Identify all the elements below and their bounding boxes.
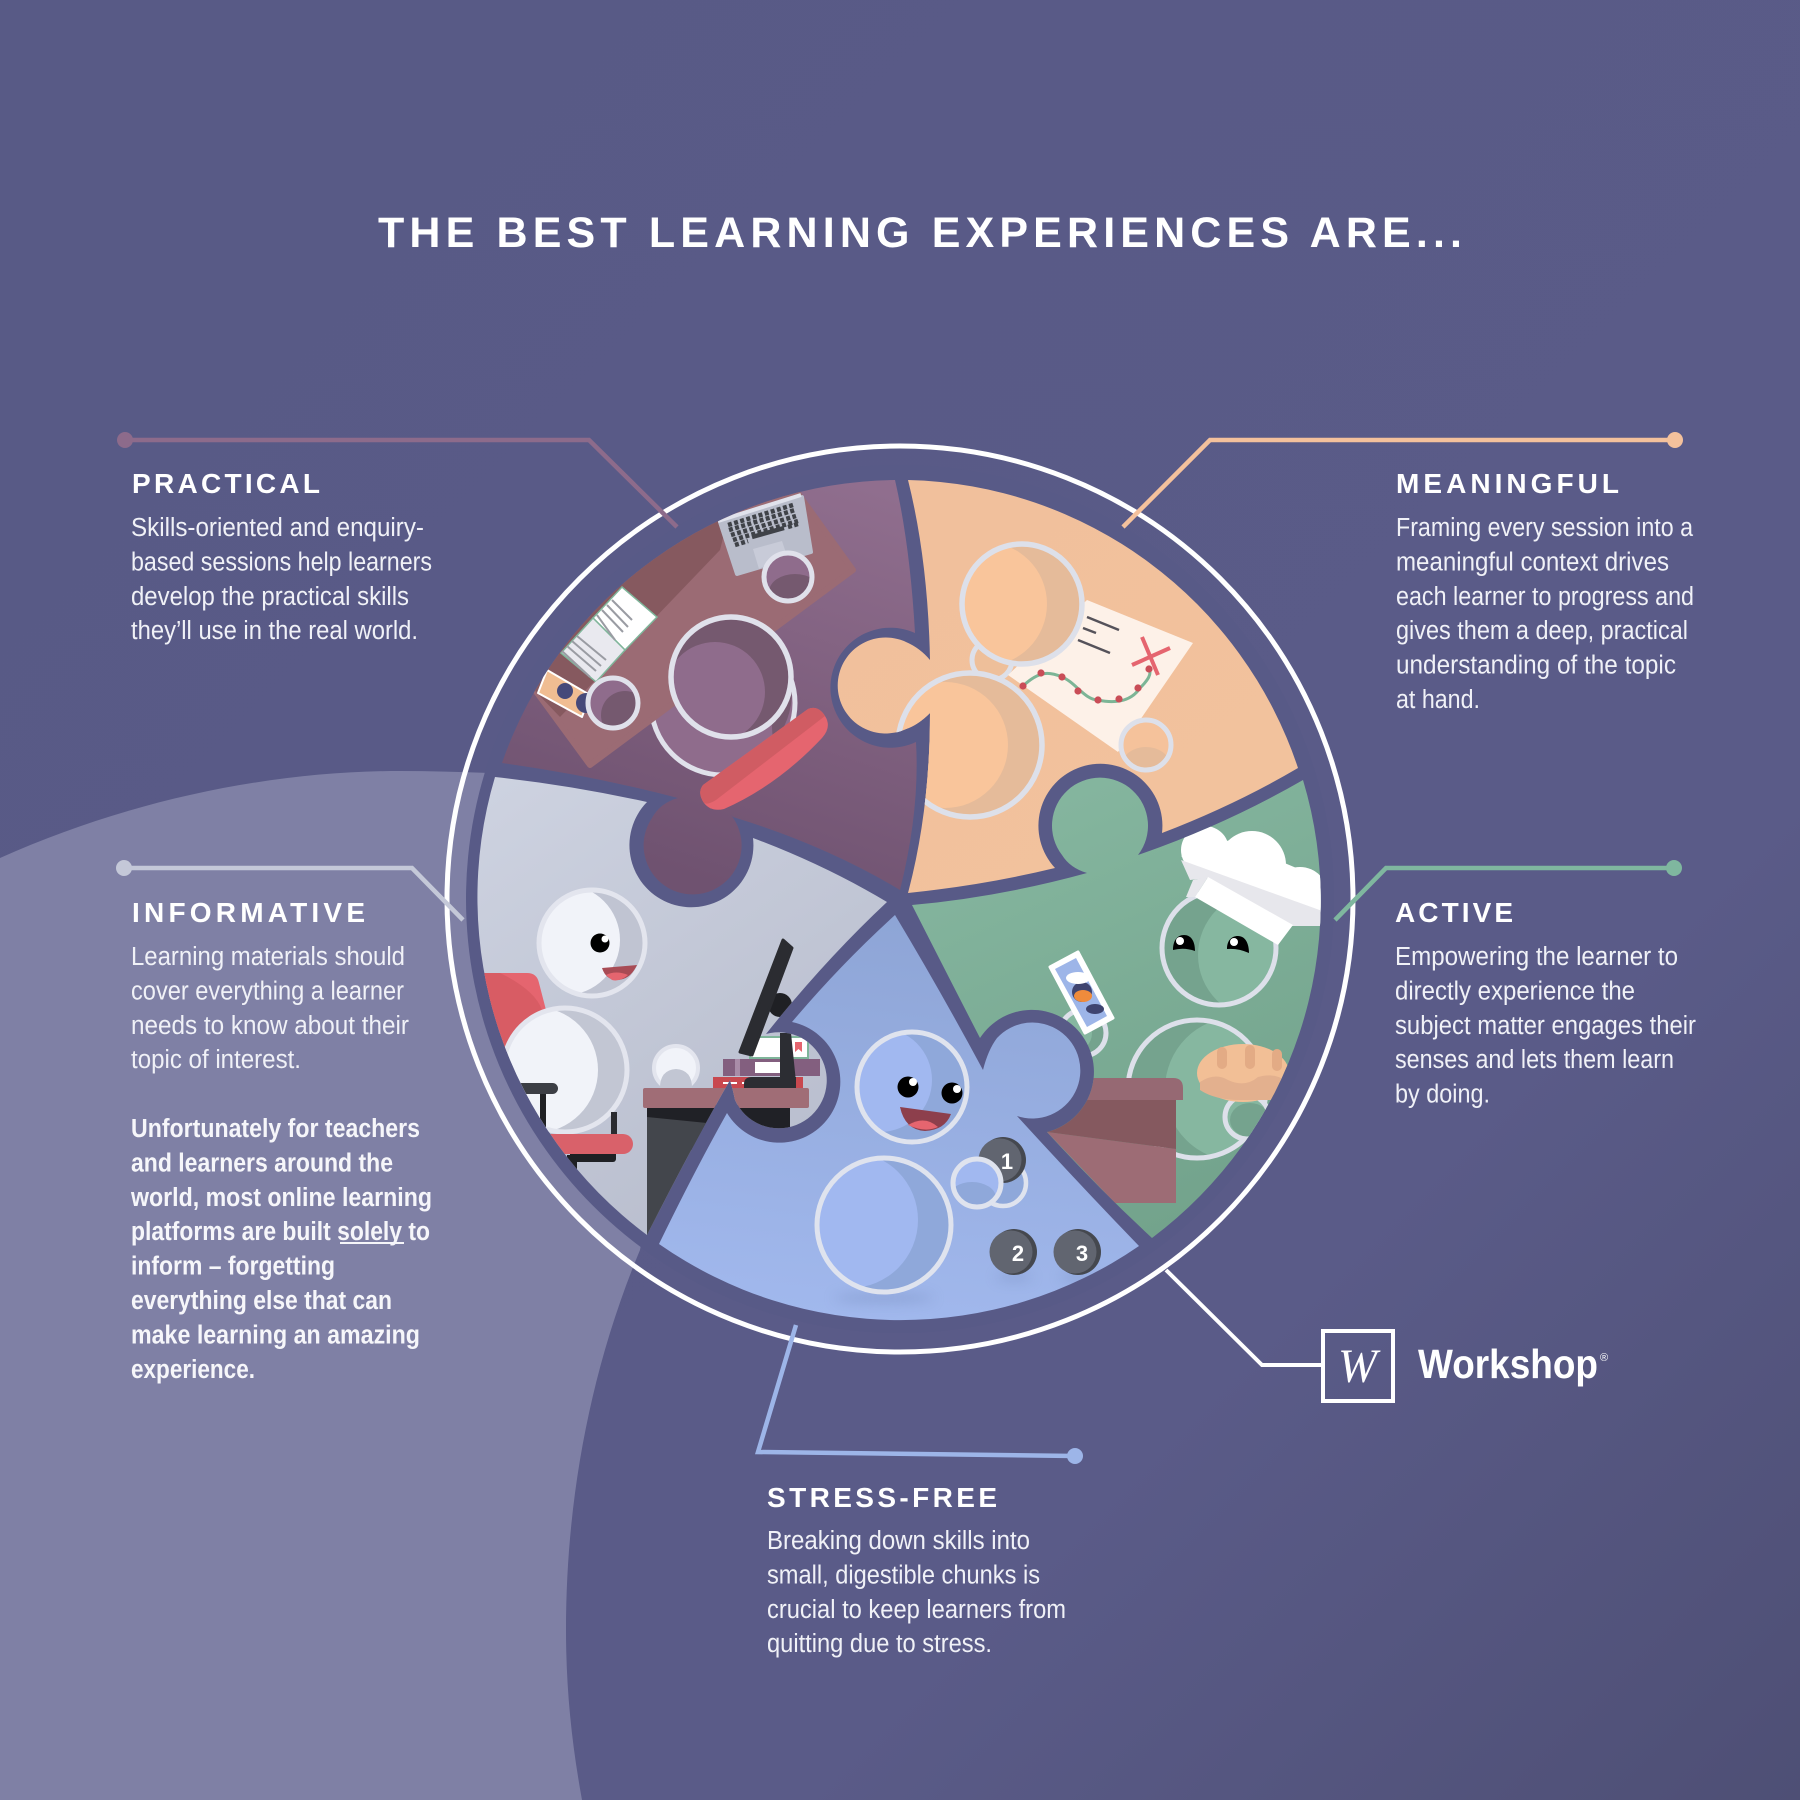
text block: informative: Unfortunately for teachers [131, 1115, 420, 1143]
character head: meaningful [959, 541, 1085, 667]
connector: active [1335, 860, 1682, 920]
text block: active: Empowering the learner to [1395, 943, 1678, 971]
slice: stress-free [659, 915, 1139, 1320]
chef hat [1181, 826, 1328, 945]
chair armrest [700, 708, 828, 810]
text block: meaningful: each learner to progress and [1396, 583, 1694, 611]
text block: informative: platforms are built solely to [131, 1218, 430, 1246]
monitor [740, 940, 796, 1088]
logo: Workshop: W [1338, 1340, 1381, 1393]
background light blob [0, 771, 650, 1800]
text block: informative: inform – forgetting [131, 1253, 335, 1281]
coin 3: 3 [1076, 1241, 1088, 1266]
text block: informative: world, most online learning [130, 1184, 432, 1212]
circular puzzle diagram [447, 420, 1353, 1352]
text block: meaningful: understanding of the topic [1396, 652, 1676, 680]
character head: practical [665, 615, 793, 742]
character hand: top [762, 550, 814, 604]
text block: meaningful: gives them a deep, practical [1396, 617, 1688, 645]
character hand: lower [1225, 1095, 1270, 1139]
character hand holding phone [1062, 1010, 1108, 1057]
coin 1 [978, 1137, 1026, 1183]
text block: active: ACTIVE [1395, 897, 1513, 928]
character head: active [1160, 892, 1278, 1008]
shadows on ground [834, 1273, 1096, 1303]
text block: meaningful: meaningful context drives [1396, 548, 1669, 576]
logo: Workshop [1323, 1331, 1608, 1401]
character body: active [1126, 1018, 1268, 1160]
text block: informative: everything else that can [131, 1287, 392, 1315]
character body: meaningful [882, 671, 1044, 819]
text block: informative: experience. [131, 1356, 255, 1384]
character body: practical [651, 680, 798, 777]
coin 1: 1 [1001, 1149, 1013, 1174]
text block: active: directly experience the [1395, 977, 1635, 1005]
front hand ring [948, 1158, 1002, 1214]
text block: practical: PRACTICAL [132, 468, 320, 499]
connector: practical [117, 432, 677, 527]
icon: bread [1197, 1044, 1289, 1102]
connector: stress-free [758, 1325, 1083, 1464]
text block: informative: make learning an amazing [131, 1321, 420, 1349]
text block: informative [130, 897, 432, 1384]
slice: informative [470, 777, 887, 1250]
treasure map [1008, 600, 1193, 752]
text block: practical: Skills-oriented and enquiry- [131, 514, 424, 542]
counter [1047, 1078, 1183, 1203]
text block: informative: and learners around the [131, 1149, 393, 1177]
text block: active: senses and lets them learn [1395, 1046, 1674, 1074]
character hand: left [586, 676, 640, 730]
connector: meaningful [1123, 432, 1683, 527]
character hand: meaningful [1121, 720, 1171, 783]
character body: stress-free [782, 1152, 953, 1294]
text block: practical: they’ll use in the real world. [131, 617, 418, 645]
text block: active: subject matter engages their [1395, 1012, 1696, 1040]
icon: laptop [718, 495, 811, 574]
text block: meaningful: MEANINGFUL [1396, 468, 1619, 499]
text block: informative: topic of interest. [131, 1046, 301, 1074]
title: THE BEST LEARNING EXPERIENCES ARE... [378, 209, 1462, 257]
slice: practical [502, 480, 917, 894]
text block: stress-free: STRESS-FREE [767, 1482, 997, 1513]
text block: informative: Learning materials should [131, 943, 405, 971]
character head: informative [536, 888, 648, 998]
icon: open book [561, 587, 657, 682]
text block: informative: cover everything a learner [131, 977, 404, 1005]
text block: meaningful: at hand. [1396, 686, 1480, 714]
text block: practical [131, 468, 432, 645]
text block: stress-free: small, digestible chunks is [767, 1561, 1040, 1589]
back hand ring [980, 1160, 1026, 1206]
desk [643, 1088, 809, 1250]
character head: stress-free [828, 1028, 969, 1144]
chair back [484, 973, 546, 1052]
connector: informative [116, 860, 463, 920]
outer white ring [447, 446, 1353, 1352]
text block: active: by doing. [1395, 1081, 1490, 1109]
text block: meaningful: Framing every session into a [1396, 514, 1694, 542]
icon: cup [654, 1046, 698, 1090]
text block: stress-free: crucial to keep learners from [767, 1596, 1066, 1624]
logo: Workshop: ® [1600, 1352, 1608, 1364]
text block: informative: needs to know about their [131, 1012, 409, 1040]
character body: informative [505, 1006, 630, 1134]
slice: active [912, 778, 1328, 1238]
slice: meaningful [838, 480, 1298, 893]
desk: practical [534, 492, 856, 768]
icon: phone on desk [537, 670, 588, 718]
text block: practical: based sessions help learners [131, 548, 432, 576]
text block: practical: develop the practical skills [131, 583, 409, 611]
text block: stress-free [767, 1482, 1066, 1658]
logo: Workshop: Workshop [1418, 1341, 1598, 1387]
coin 3 [1054, 1229, 1101, 1275]
text block: active [1395, 897, 1696, 1109]
puzzle backing disc [466, 465, 1334, 1333]
icon: smartphone [1050, 952, 1113, 1033]
connector: workshop logo [1166, 1270, 1322, 1365]
hand behind [972, 640, 1012, 680]
text block: informative: INFORMATIVE [132, 897, 365, 928]
coin 2: 2 [1012, 1241, 1024, 1266]
books [713, 1037, 820, 1088]
text block: meaningful [1396, 468, 1694, 714]
text block: stress-free: quitting due to stress. [767, 1630, 992, 1658]
text block: stress-free: Breaking down skills into [767, 1527, 1030, 1555]
chair arm and seat [520, 1083, 633, 1169]
coin 2 [990, 1229, 1037, 1275]
